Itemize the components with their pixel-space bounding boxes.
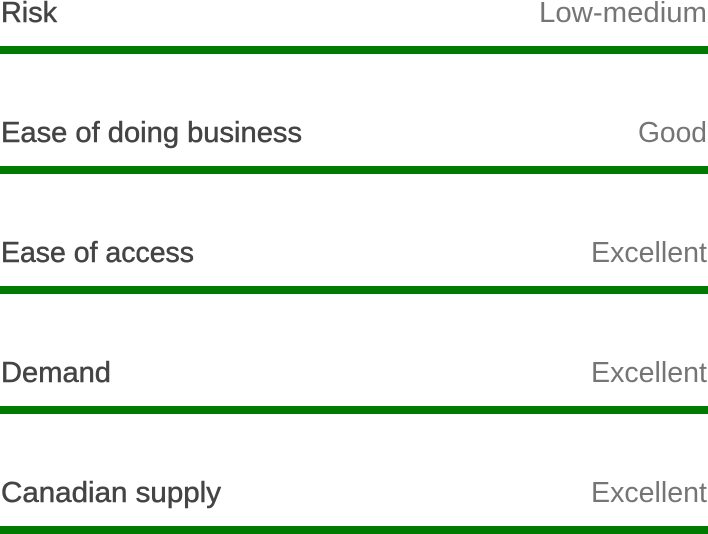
green bar: ease of doing business xyxy=(0,166,708,174)
row: demand xyxy=(0,357,708,414)
row: ease of doing business xyxy=(0,117,708,174)
label: canadian supply: Canadian supply xyxy=(1,477,222,509)
value: excellent: Excellent xyxy=(591,237,707,269)
green bar: ease of access xyxy=(0,286,708,294)
label: ease of doing business: Ease of doing business xyxy=(1,117,302,149)
green bar: canadian supply xyxy=(0,526,708,534)
row: canadian supply xyxy=(0,477,708,534)
label: demand: Demand xyxy=(1,357,111,389)
label: ease of access: Ease of access xyxy=(1,237,194,269)
row: ease of access xyxy=(0,237,708,294)
value: excellent: Excellent xyxy=(591,357,707,389)
value: good: Good xyxy=(638,117,707,149)
green bar: risk xyxy=(0,46,708,54)
row: risk xyxy=(0,0,708,54)
value: excellent: Excellent xyxy=(591,477,707,509)
green bar: demand xyxy=(0,406,708,414)
